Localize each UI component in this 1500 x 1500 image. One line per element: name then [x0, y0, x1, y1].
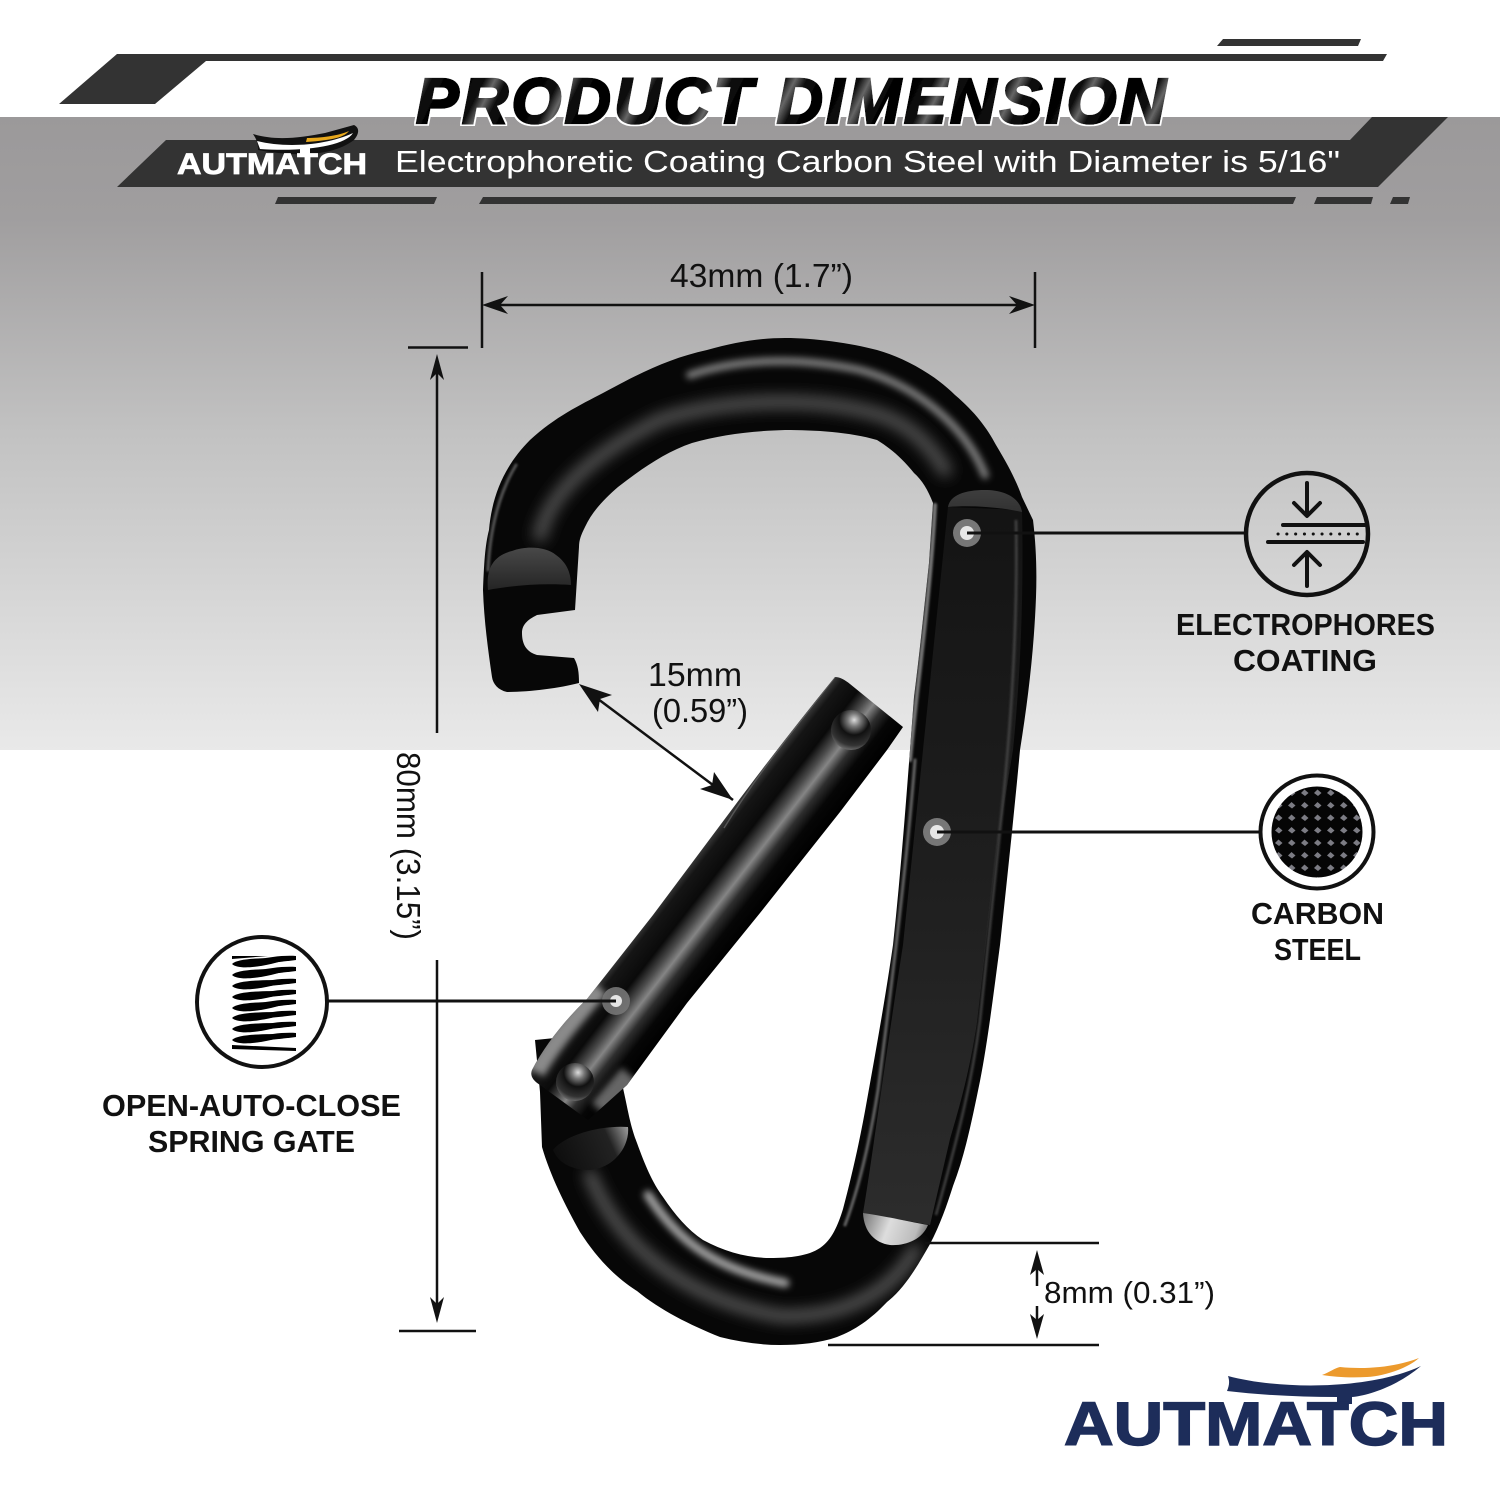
background gradient panel — [0, 117, 1500, 750]
brand logo — [1064, 1358, 1448, 1458]
dimension: thickness 8mm: 8mm (0.31”) — [1044, 1275, 1215, 1310]
callout: carbon steel: CARBON — [1251, 896, 1384, 931]
banner subtitle: Electrophoretic Coating Carbon Steel with Diameter is 5/16" — [395, 144, 1340, 179]
header decoration: top bars — [59, 39, 1387, 104]
icon: coating layer — [1246, 473, 1368, 595]
dimension: gate opening 15mm: (0.59”) — [652, 692, 748, 729]
gate bottom rivet — [556, 1063, 594, 1101]
banner underline bars — [275, 197, 1410, 204]
gate top rivet — [831, 710, 871, 750]
dimension: gate opening 15mm: 15mm — [648, 656, 742, 693]
callout: spring gate — [102, 937, 630, 1159]
callout: electrophores coating: COATING — [1233, 643, 1377, 678]
callout: carbon steel: STEEL — [1274, 932, 1361, 967]
callout: carbon steel — [923, 776, 1384, 967]
dimension: width 43mm: 43mm (1.7”) — [670, 257, 853, 294]
hinge lens — [553, 1127, 628, 1170]
dimension: height 80mm: 80mm (3.15”) — [390, 752, 427, 940]
hook cap — [488, 548, 571, 590]
dimension: gate opening 15mm — [579, 656, 748, 800]
header banner — [117, 117, 1448, 187]
dimension: thickness 8mm — [828, 1243, 1215, 1345]
callout: spring gate: SPRING GATE — [148, 1124, 355, 1159]
title: PRODUCT DIMENSION — [416, 65, 1168, 137]
icon: carbon texture — [1260, 776, 1374, 888]
body base shape — [483, 338, 1036, 1345]
callout: electrophores coating — [953, 473, 1435, 678]
flat spine of carabiner — [863, 490, 1023, 1245]
callout: electrophores coating: ELECTROPHORES — [1176, 607, 1435, 642]
dimension: height 80mm — [390, 348, 476, 1331]
spring gate — [531, 677, 903, 1120]
small autmatch logo: AUTMATCH — [177, 148, 367, 181]
dimension: width 43mm — [482, 257, 1035, 348]
callout: spring gate: OPEN-AUTO-CLOSE — [102, 1088, 401, 1123]
icon: spring — [197, 937, 327, 1067]
small autmatch logo — [177, 125, 367, 181]
carabiner body — [483, 338, 1036, 1345]
brand logo: AUTMATCH — [1064, 1390, 1448, 1458]
body highlights — [488, 361, 985, 1316]
